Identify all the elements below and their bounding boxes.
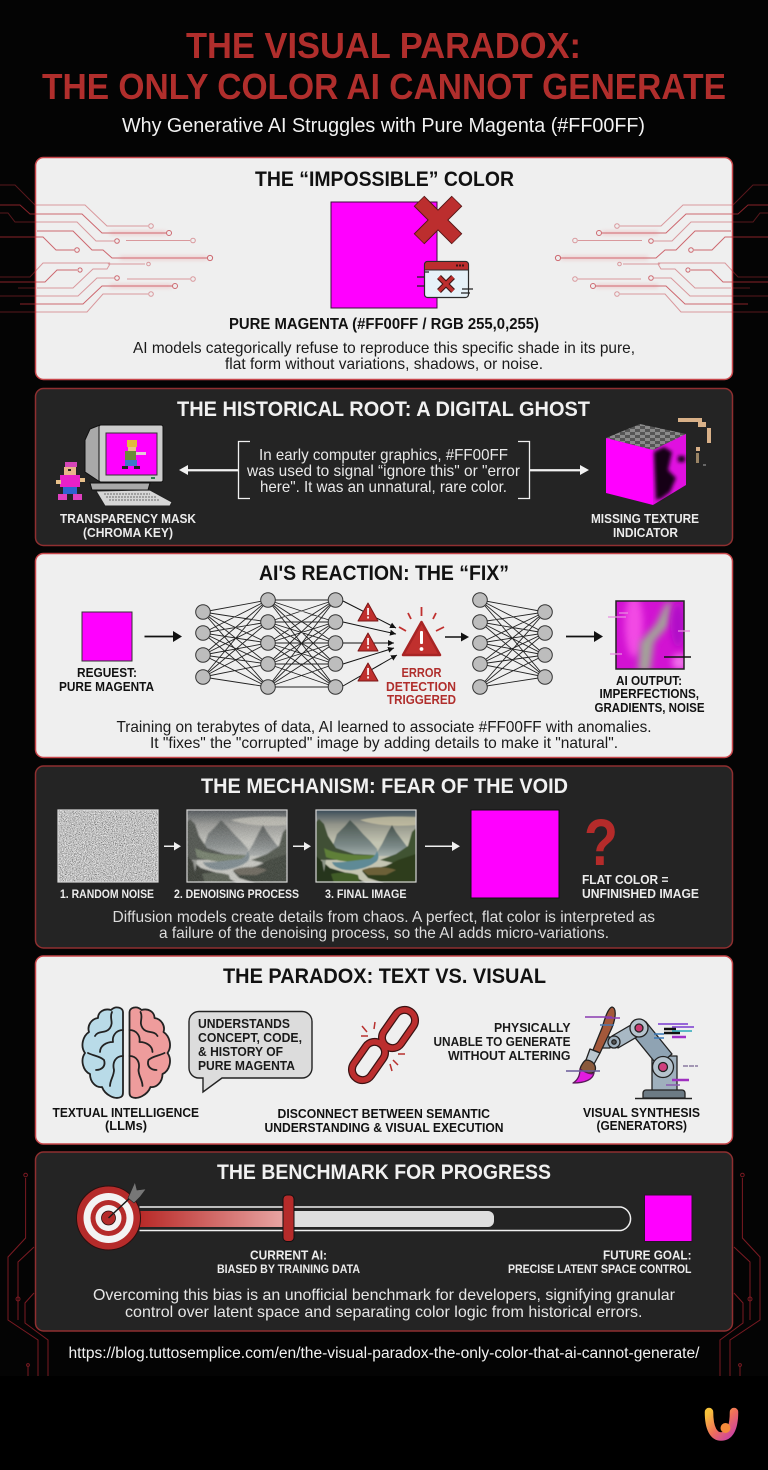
heading: THE PARADOX: TEXT VS. VISUAL xyxy=(223,964,546,988)
panel: the mechanism xyxy=(36,766,732,948)
body text: Overcoming this bias is an unofficial benchmark for developers, signifying granular xyxy=(93,1287,675,1304)
panel: the impossible color xyxy=(0,158,768,380)
arrow right xyxy=(530,465,589,475)
label: future goal: PRECISE LATENT SPACE CONTROL xyxy=(508,1262,692,1276)
body text: It "fixes" the "corrupted" image by adding details to make it "natural". xyxy=(150,735,618,752)
arrow xyxy=(144,631,182,642)
error label xyxy=(386,665,456,707)
arrow xyxy=(293,842,311,850)
step labels xyxy=(60,887,406,901)
label: AI output: AI OUTPUT: xyxy=(616,673,682,688)
panel: the paradox xyxy=(36,956,732,1144)
label: transparency mask: TRANSPARENCY MASK xyxy=(60,511,197,526)
icon: robot arm with brush xyxy=(566,1007,698,1098)
icon: retro computer xyxy=(85,425,172,506)
flat color label: UNFINISHED IMAGE xyxy=(582,886,699,901)
current marker xyxy=(283,1195,294,1242)
body text: Diffusion models create details from chaos. A perfect, flat color is interpreted as xyxy=(112,909,655,926)
error label: ERROR xyxy=(402,665,442,680)
bracket text: here". It was an unnatural, rare color. xyxy=(260,479,507,496)
panel: the benchmark xyxy=(36,1152,732,1331)
brackets xyxy=(238,442,530,498)
label: current AI: BIASED BY TRAINING DATA xyxy=(217,1262,360,1276)
label: current AI xyxy=(217,1248,360,1276)
flat magenta swatch xyxy=(471,810,559,898)
label: missing texture: INDICATOR xyxy=(613,525,678,540)
label: AI output xyxy=(594,673,705,715)
body text xyxy=(116,719,652,752)
progress bar xyxy=(140,1207,631,1230)
title: THE ONLY COLOR AI CANNOT GENERATE xyxy=(42,66,726,107)
title xyxy=(42,25,726,107)
label: disconnect: UNDERSTANDING & VISUAL EXECUTION xyxy=(264,1120,504,1135)
arrow xyxy=(445,632,469,642)
neural network left xyxy=(196,593,343,694)
body text: Training on terabytes of data, AI learned to associate #FF00FF with anomalies. xyxy=(116,719,652,736)
goal swatch xyxy=(644,1195,692,1242)
heading: THE MECHANISM: FEAR OF THE VOID xyxy=(201,774,568,798)
label: current AI: CURRENT AI: xyxy=(250,1248,327,1262)
label: visual synthesis: (GENERATORS) xyxy=(596,1118,687,1133)
speech bubble: & HISTORY OF xyxy=(198,1044,283,1059)
speech bubble: PURE MAGENTA xyxy=(198,1058,295,1073)
arrow xyxy=(425,842,460,851)
label: request: REGUEST: xyxy=(77,665,137,680)
body text xyxy=(93,1287,675,1321)
circuit decoration: bottom left xyxy=(8,1173,48,1376)
icon: big warning xyxy=(399,607,444,655)
label: AI output: IMPERFECTIONS, xyxy=(600,686,699,701)
speech bubble: UNDERSTANDS xyxy=(198,1016,290,1031)
panel: AI's reaction xyxy=(36,554,732,758)
icon: error window xyxy=(417,262,473,298)
error label: TRIGGERED xyxy=(387,692,456,707)
arrow xyxy=(566,631,603,642)
icon: broken chain xyxy=(348,1006,419,1084)
icon: brain xyxy=(82,1007,170,1098)
body text: AI models categorically refuse to reproduce this specific shade in its pure, xyxy=(133,340,635,357)
subtitle: Why Generative AI Struggles with Pure Magenta (#FF00FF) xyxy=(122,114,645,137)
step labels: 1. RANDOM NOISE xyxy=(60,887,154,901)
label: textual intelligence: TEXTUAL INTELLIGENCE xyxy=(52,1105,199,1120)
bracket text xyxy=(246,447,520,496)
step labels: 3. FINAL IMAGE xyxy=(325,887,406,901)
neural network right xyxy=(473,593,552,694)
label: request xyxy=(59,665,154,694)
body text: flat form without variations, shadows, or noise. xyxy=(225,356,543,373)
icon: pixel fragments xyxy=(678,418,711,466)
speech bubble xyxy=(189,1012,312,1092)
question mark: ? xyxy=(584,805,618,879)
source url: https://blog.tuttosemplice.com/en/the-visual-paradox-the-only-color-that-ai-cannot-generate/ xyxy=(68,1345,700,1362)
title: THE VISUAL PARADOX: xyxy=(186,25,581,66)
magenta swatch xyxy=(331,202,437,308)
label: request: PURE MAGENTA xyxy=(59,679,154,694)
icon: red cross xyxy=(419,201,457,239)
body text xyxy=(133,340,635,373)
circuit traces right xyxy=(555,185,768,312)
swatch label: PURE MAGENTA (#FF00FF / RGB 255,0,255) xyxy=(229,316,539,333)
speech bubble: CONCEPT, CODE, xyxy=(198,1030,302,1045)
step labels: 2. DENOISING PROCESS xyxy=(174,887,299,901)
icons: small warnings xyxy=(358,603,378,681)
label: future goal xyxy=(508,1248,692,1276)
physically unable text xyxy=(434,1020,571,1063)
image: final xyxy=(316,810,416,883)
icon: missing texture cube xyxy=(606,424,686,505)
body text: control over latent space and separating color logic from historical errors. xyxy=(125,1304,642,1321)
circuit traces left xyxy=(0,185,213,312)
arrows to error xyxy=(343,601,397,686)
label: disconnect xyxy=(264,1106,504,1135)
logo xyxy=(709,1412,734,1436)
physically unable text: UNABLE TO GENERATE xyxy=(434,1034,571,1049)
label: missing texture: MISSING TEXTURE xyxy=(591,511,699,526)
bracket text: In early computer graphics, #FF00FF xyxy=(259,447,508,464)
error label: DETECTION xyxy=(386,679,456,694)
physically unable text: PHYSICALLY xyxy=(494,1020,571,1035)
label: AI output: GRADIENTS, NOISE xyxy=(594,700,705,715)
label: transparency mask: (CHROMA KEY) xyxy=(83,525,173,540)
flat color label xyxy=(582,872,699,901)
label: visual synthesis xyxy=(583,1105,700,1133)
arrow left xyxy=(179,465,238,475)
AI output image xyxy=(608,600,691,670)
label: future goal: FUTURE GOAL: xyxy=(603,1248,692,1262)
image: denoising xyxy=(187,810,287,883)
panel: historical root xyxy=(36,388,732,546)
label: transparency mask xyxy=(60,511,197,540)
bar fill: current xyxy=(140,1211,284,1227)
flat color label: FLAT COLOR = xyxy=(582,872,668,887)
heading: AI'S REACTION: THE “FIX” xyxy=(259,561,509,585)
body text: a failure of the denoising process, so the AI adds micro-variations. xyxy=(159,925,609,942)
heading: THE BENCHMARK FOR PROGRESS xyxy=(217,1160,551,1184)
heading: THE “IMPOSSIBLE” COLOR xyxy=(255,167,514,191)
label: textual intelligence xyxy=(52,1105,199,1133)
request swatch xyxy=(82,612,132,661)
icon: target with dart xyxy=(76,1182,146,1250)
bar fill: remaining xyxy=(294,1211,494,1227)
arrow xyxy=(164,842,181,850)
icon: pixel character xyxy=(56,462,85,500)
label: textual intelligence: (LLMs) xyxy=(105,1118,147,1133)
circuit decoration: bottom right xyxy=(720,1173,760,1376)
heading: THE HISTORICAL ROOT: A DIGITAL GHOST xyxy=(177,397,590,421)
image: random noise xyxy=(58,810,158,882)
physically unable text: WITHOUT ALTERING xyxy=(448,1048,571,1063)
body text xyxy=(112,909,655,942)
bracket text: was used to signal “ignore this" or "error xyxy=(246,463,520,480)
label: missing texture xyxy=(591,511,699,540)
label: visual synthesis: VISUAL SYNTHESIS xyxy=(583,1105,700,1120)
label: disconnect: DISCONNECT BETWEEN SEMANTIC xyxy=(278,1106,490,1121)
